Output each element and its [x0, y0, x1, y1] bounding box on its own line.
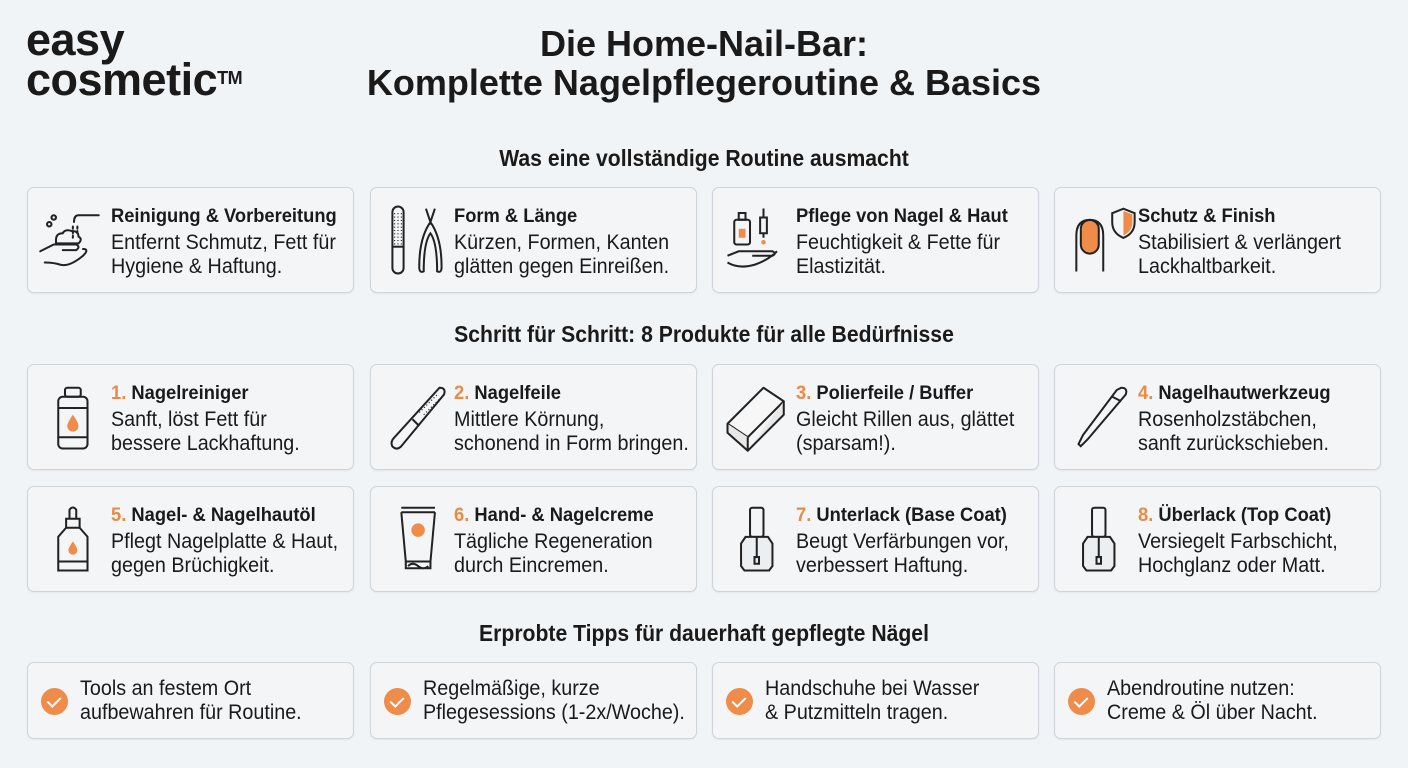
icon: washing hand — [39, 214, 100, 266]
text — [423, 677, 685, 724]
text: Pflege von Nagel & Haut — [796, 205, 1008, 227]
icon: cuticle stick — [1077, 386, 1128, 448]
text — [111, 382, 300, 455]
text: Sanft, löst Fett für — [111, 408, 267, 431]
tip 3 — [712, 662, 1039, 739]
text: schonend in Form bringen. — [454, 432, 689, 455]
text — [796, 205, 1008, 278]
text: 1. Nagelreiniger — [111, 382, 249, 404]
text — [1107, 677, 1318, 724]
text: aufbewahren für Routine. — [80, 701, 302, 724]
text: Pflegesessions (1-2x/Woche). — [423, 701, 685, 724]
text: Schutz & Finish — [1138, 205, 1275, 227]
icon: bottle — [57, 386, 88, 450]
icon: nail file — [390, 386, 446, 450]
text: glätten gegen Einreißen. — [454, 255, 669, 278]
tip 1 — [27, 662, 354, 739]
text: 4. Nagelhautwerkzeug — [1138, 382, 1331, 404]
text: Entfernt Schmutz, Fett für — [111, 231, 336, 254]
tip 2 — [370, 662, 697, 739]
text — [765, 677, 979, 724]
logo: cosmeticTM — [26, 54, 242, 105]
text: 7. Unterlack (Base Coat) — [796, 504, 1007, 526]
text: 6. Hand- & Nagelcreme — [454, 504, 654, 526]
text: durch Eincremen. — [454, 554, 609, 577]
text — [796, 504, 1009, 577]
card: 4 Nagelhautwerkzeug — [1054, 364, 1381, 470]
card: 1 Nagelreiniger — [27, 364, 354, 470]
text — [111, 504, 338, 577]
text: Tools an festem Ort — [80, 677, 251, 700]
icon: polish bottle — [1082, 506, 1116, 572]
text — [111, 205, 337, 278]
text: Lackhaltbarkeit. — [1138, 255, 1276, 278]
tip 4 — [1054, 662, 1381, 739]
text: Handschuhe bei Wasser — [765, 677, 979, 700]
text: Abendroutine nutzen: — [1107, 677, 1295, 700]
heading: tips: Erprobte Tipps für dauerhaft gepflegte Nägel — [479, 620, 929, 646]
text: Mittlere Körnung, — [454, 408, 604, 431]
text: Rosenholzstäbchen, — [1138, 408, 1317, 431]
text — [1138, 205, 1341, 278]
icon: check — [726, 688, 753, 715]
text: Hochglanz oder Matt. — [1138, 554, 1326, 577]
icon: bottle dropper hand — [727, 208, 778, 268]
card: 8 Überlack — [1054, 486, 1381, 592]
text: verbessert Haftung. — [796, 554, 968, 577]
text: Form & Länge — [454, 205, 577, 227]
text: Pflegt Nagelplatte & Haut, — [111, 530, 338, 553]
card: Schutz — [1054, 187, 1381, 293]
text: 8. Überlack (Top Coat) — [1138, 504, 1331, 526]
text: Gleicht Rillen aus, glättet — [796, 408, 1014, 431]
text: Beugt Verfärbungen vor, — [796, 530, 1009, 553]
text: Feuchtigkeit & Fette für — [796, 231, 1000, 254]
logo: easy — [26, 14, 124, 65]
text: & Putzmitteln tragen. — [765, 701, 948, 724]
card: 5 Öl — [27, 486, 354, 592]
text: Kürzen, Formen, Kanten — [454, 231, 669, 254]
text — [1138, 504, 1338, 577]
card: Pflege — [712, 187, 1039, 293]
text: Stabilisiert & verlängert — [1138, 231, 1341, 254]
icon: nail and shield — [1075, 208, 1136, 272]
text: gegen Brüchigkeit. — [111, 554, 275, 577]
card: 6 Creme — [370, 486, 697, 592]
text: Elastizität. — [796, 255, 886, 278]
card: Reinigung — [27, 187, 354, 293]
text: Reinigung & Vorbereitung — [111, 205, 337, 227]
text — [454, 205, 669, 278]
icon: buffer block — [726, 386, 785, 452]
text: 3. Polierfeile / Buffer — [796, 382, 973, 404]
text — [1138, 382, 1331, 455]
heading: routine: Was eine vollständige Routine ausmacht — [499, 145, 909, 171]
text: Creme & Öl über Nacht. — [1107, 701, 1318, 724]
card: 7 Unterlack — [712, 486, 1039, 592]
title: Die Home-Nail-Bar: — [540, 23, 868, 64]
text — [454, 382, 689, 455]
icon: check — [384, 688, 411, 715]
text — [796, 382, 1014, 455]
text: Regelmäßige, kurze — [423, 677, 600, 700]
title — [367, 23, 1041, 103]
icon: cream tube — [400, 506, 436, 570]
heading: products: Schritt für Schritt: 8 Produkte für alle Bedürfnisse — [454, 321, 954, 347]
text: bessere Lackhaftung. — [111, 432, 300, 455]
text: sanft zurückschieben. — [1138, 432, 1329, 455]
text: Versiegelt Farbschicht, — [1138, 530, 1338, 553]
text — [454, 504, 654, 577]
card: Form — [370, 187, 697, 293]
logo — [26, 14, 242, 105]
icon: dropper bottle — [57, 506, 88, 572]
card: 2 Nagelfeile — [370, 364, 697, 470]
text: 2. Nagelfeile — [454, 382, 561, 404]
text — [80, 677, 302, 724]
text: 5. Nagel- & Nagelhautöl — [111, 504, 316, 526]
card: 3 Buffer — [712, 364, 1039, 470]
text: Tägliche Regeneration — [454, 530, 653, 553]
icon: check — [41, 688, 68, 715]
icon: polish bottle — [740, 506, 774, 572]
icon: file and nipper — [391, 206, 443, 274]
text: Hygiene & Haftung. — [111, 255, 282, 278]
title: Komplette Nagelpflegeroutine & Basics — [367, 62, 1041, 103]
icon: check — [1068, 688, 1095, 715]
text: (sparsam!). — [796, 432, 896, 455]
